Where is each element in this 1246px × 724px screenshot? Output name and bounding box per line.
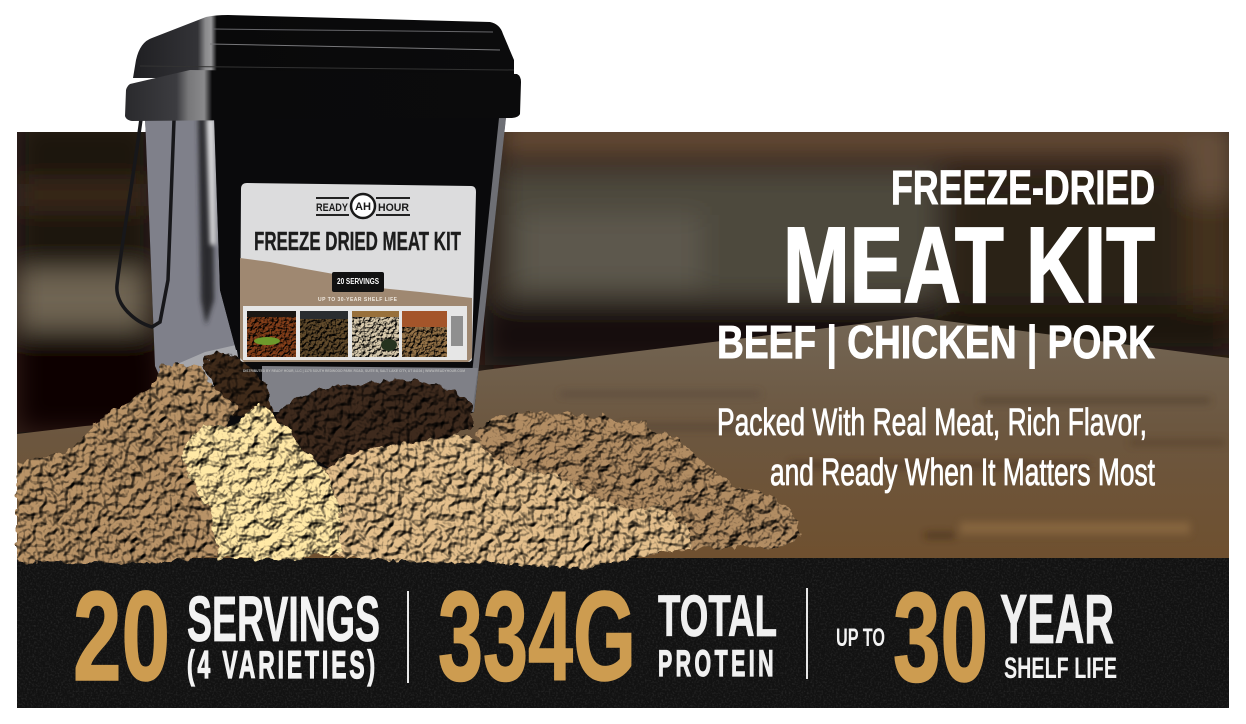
lid highlight lines — [140, 29, 514, 70]
brand logo: READY — [316, 202, 349, 214]
photo strip — [243, 306, 467, 360]
reflected dark pile — [200, 350, 272, 420]
stat: 334g total protein: TOTAL — [658, 584, 777, 649]
icon: black meat kit bucket — [117, 15, 521, 470]
food: right dark brown meat pile — [476, 412, 802, 552]
brand logo: AH — [355, 201, 371, 213]
reflection lower facet — [168, 345, 240, 395]
divider — [407, 591, 409, 683]
heading: freeze-dried: FREEZE-DRIED — [891, 162, 1155, 215]
stat: up to 30 year shelf life: YEAR — [1000, 580, 1114, 658]
tagline — [717, 402, 1155, 494]
divider — [806, 588, 808, 679]
stat: up to 30 year shelf life — [836, 566, 1117, 708]
panel: bottom stats bar — [17, 558, 1229, 708]
reflection white highlight — [206, 118, 216, 245]
panel: kitchen background photo — [17, 120, 1235, 560]
heading block — [717, 162, 1155, 494]
bucket body — [145, 116, 506, 470]
heading: varieties: BEEF | CHICKEN | PORK — [717, 316, 1155, 368]
servings badge — [332, 272, 384, 292]
shelf life line: UP TO 30-YEAR SHELF LIFE — [318, 297, 398, 303]
stat: 20 servings: SERVINGS — [187, 583, 380, 655]
stat: up to 30 year shelf life: UP TO — [836, 624, 885, 652]
right edge highlight — [468, 118, 506, 412]
food: middle light pork pile — [326, 434, 690, 568]
bucket lid rim — [125, 70, 521, 121]
stat: 20 servings — [73, 565, 380, 707]
servings badge: 20 SERVINGS — [337, 277, 380, 286]
stat: up to 30 year shelf life: 30 — [893, 566, 988, 708]
stat: 20 servings: (4 VARIETIES) — [187, 644, 378, 687]
bucket bottom grey reflection — [262, 366, 478, 412]
bucket lid top — [133, 15, 514, 78]
brand logo — [316, 194, 410, 218]
food: left beef crumble pile — [17, 364, 238, 564]
product label — [240, 183, 476, 362]
distributor small print: DISTRIBUTED BY READY HOUR, LLC | 1175 SOUTH REDWOOD PARK ROAD, SUITE B, SALT LAKE CITY, UT 84104 | WWW.READYHOUR.COM — [243, 369, 465, 373]
reflection dark stripe — [198, 116, 214, 325]
stat: 334g total protein: 334G — [438, 565, 636, 707]
label title: FREEZE DRIED MEAT KIT — [254, 226, 461, 256]
stat: up to 30 year shelf life: SHELF LIFE — [1004, 652, 1117, 685]
label brown band — [240, 258, 472, 362]
brand logo: HOUR — [378, 202, 409, 214]
wooden table top — [17, 317, 1229, 560]
bucket grey side reflection — [145, 116, 240, 400]
bucket handle — [117, 95, 174, 327]
black side curve — [214, 116, 240, 350]
dark meat pile seen through bucket — [272, 380, 472, 470]
stat: 20 servings: 20 — [73, 565, 170, 707]
stat: 334g total protein: PROTEIN — [658, 643, 777, 684]
food: yellow chicken pile — [182, 404, 340, 560]
